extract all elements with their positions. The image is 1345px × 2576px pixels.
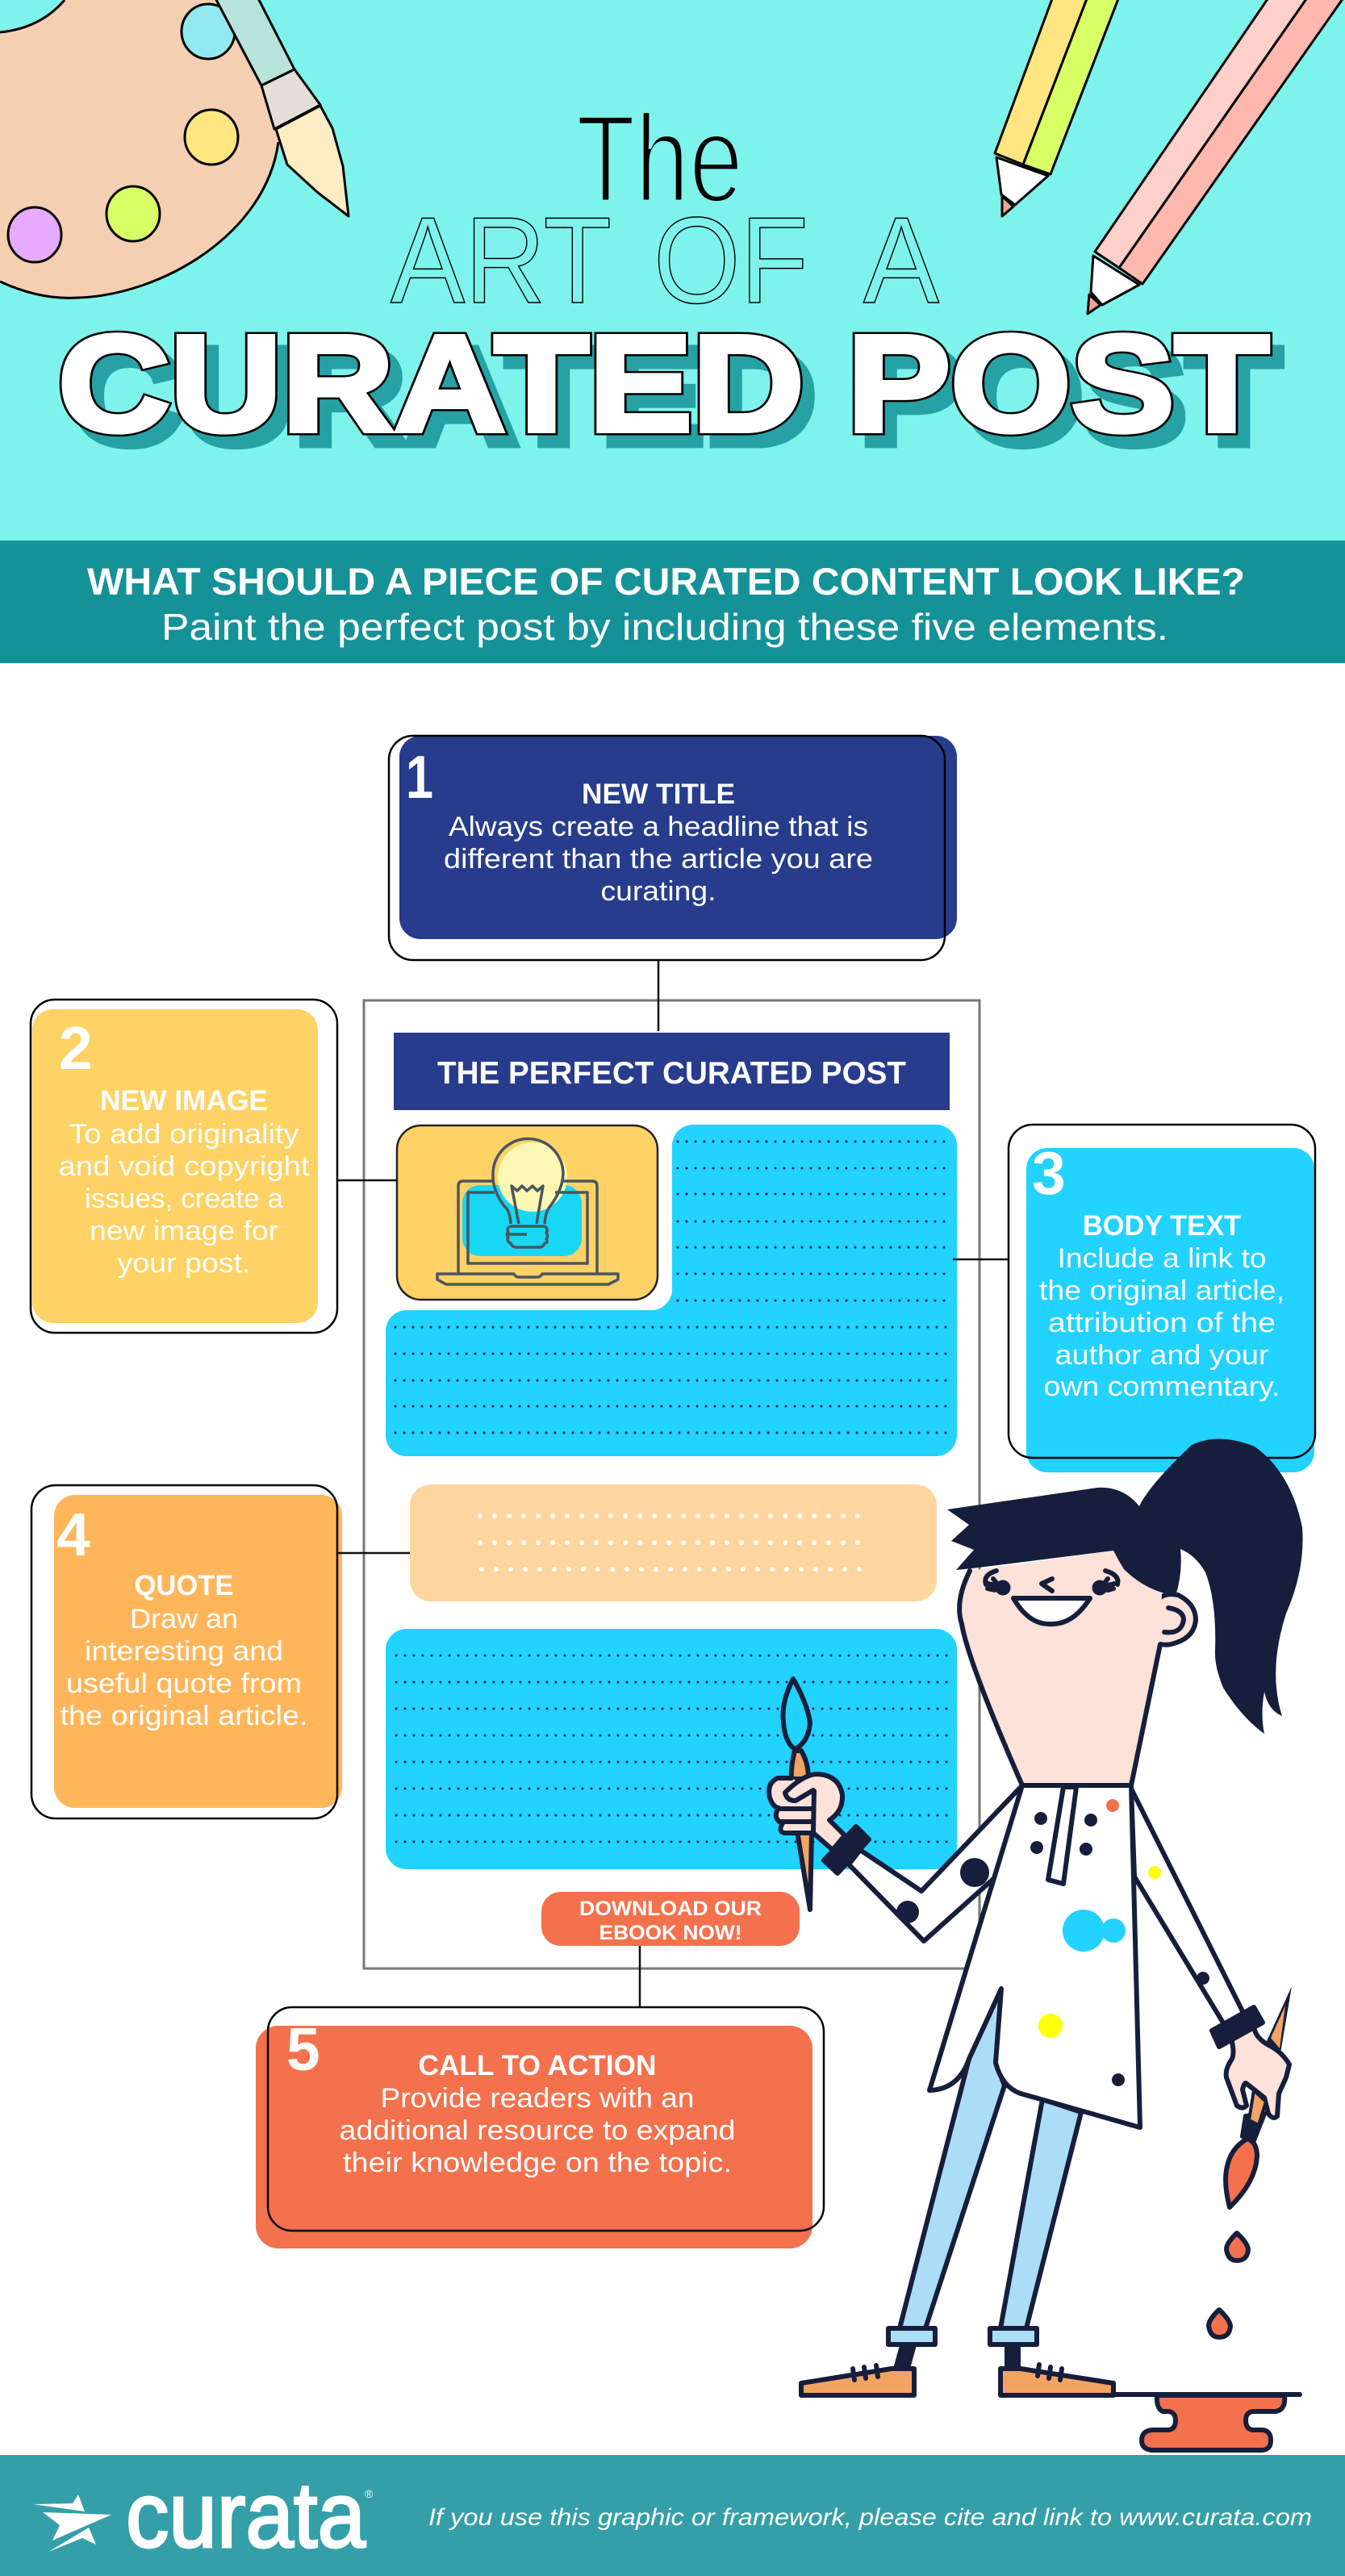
band subheading: Paint the perfect post by including these five elements. xyxy=(161,606,1168,648)
panel 2: new image: your post. xyxy=(118,1248,250,1279)
quote block xyxy=(410,1484,937,1601)
call to action button: DOWNLOAD OUR xyxy=(579,1898,762,1920)
panel 4: quote: 4 xyxy=(56,1501,90,1568)
post heading xyxy=(394,1033,950,1110)
illustration: painter character xyxy=(769,1438,1303,2450)
title: Art of a: OF xyxy=(654,192,808,329)
panel: perfect post frame xyxy=(364,1000,980,1969)
panel 1: new title: 1 xyxy=(406,743,433,811)
panel 4: quote: useful quote from xyxy=(66,1668,302,1699)
panel 5: call to action: additional resource to expand xyxy=(339,2115,736,2146)
image block with lightbulb and laptop xyxy=(397,1125,658,1300)
panel 5: call to action: CALL TO ACTION xyxy=(418,2050,657,2081)
icon: top paintbrush xyxy=(215,0,349,216)
panel 4: quote xyxy=(31,1485,342,1818)
sleeves xyxy=(849,1785,1243,2024)
footer xyxy=(0,2455,1345,2576)
panel 5: call to action xyxy=(256,2007,824,2248)
panel 4: quote: QUOTE xyxy=(134,1570,234,1601)
panel 2: new image: To add originality xyxy=(69,1119,299,1150)
connectors xyxy=(337,960,1009,2007)
logo wordmark: curata xyxy=(126,2464,365,2567)
panel 1: new title: curating. xyxy=(600,876,716,907)
title: The: The xyxy=(576,89,743,228)
logo star xyxy=(33,2495,111,2552)
post heading: THE PERFECT CURATED POST xyxy=(437,1056,906,1091)
panel 2: new image: NEW IMAGE xyxy=(100,1085,268,1117)
panel 3: body text: BODY TEXT xyxy=(1083,1210,1241,1242)
panel 5: call to action: 5 xyxy=(286,2015,320,2083)
panel 3: body text: the original article, xyxy=(1039,1275,1284,1306)
panel 2: new image: issues, create a xyxy=(85,1184,283,1214)
call to action button: EBOOK NOW! xyxy=(599,1922,742,1944)
panel 1: new title: Always create a headline that is xyxy=(449,812,868,842)
panel 3: body text: own commentary. xyxy=(1044,1372,1280,1402)
panel 1: new title: different than the article you are xyxy=(444,844,873,875)
icon: paint palette xyxy=(0,0,278,298)
panel 4: quote: the original article. xyxy=(60,1701,308,1731)
icon: pink pencil xyxy=(1088,0,1344,314)
panel 1: new title xyxy=(389,736,957,960)
title: Curated Post: CURATED POST xyxy=(58,307,1269,461)
panel 1: new title: NEW TITLE xyxy=(582,779,735,810)
panel 4: quote: interesting and xyxy=(85,1636,283,1667)
icon: yellow pencil xyxy=(995,0,1119,216)
hair xyxy=(947,1438,1303,1734)
panel 5: call to action: their knowledge on the topic. xyxy=(343,2148,732,2178)
call to action button xyxy=(541,1892,800,1946)
coat xyxy=(929,1785,1140,2127)
panel 2: new image xyxy=(31,1000,337,1333)
legs and shoes xyxy=(801,1989,1300,2395)
panel 3: body text: attribution of the xyxy=(1048,1308,1276,1338)
panel 2: new image: new image for xyxy=(90,1216,278,1246)
panel 3: body text: author and your xyxy=(1055,1340,1268,1371)
panel 4: quote: Draw an xyxy=(130,1604,238,1635)
head and face xyxy=(959,1551,1196,1785)
panel 3: body text xyxy=(1009,1125,1315,1472)
right hand, brush and drips xyxy=(1209,1986,1292,2337)
panel 3: body text: 3 xyxy=(1032,1139,1066,1207)
panel 5: call to action: Provide readers with an xyxy=(381,2083,694,2114)
band heading: WHAT SHOULD A PIECE OF CURATED CONTENT LOOK LIKE? xyxy=(87,560,1245,603)
paint puddle xyxy=(1142,2395,1284,2450)
panel 2: new image: 2 xyxy=(59,1014,93,1082)
body text block top xyxy=(386,1125,957,1456)
left hand and brush xyxy=(769,1679,869,1910)
panel 3: body text: Include a link to xyxy=(1057,1243,1267,1274)
registered mark: ® xyxy=(365,2487,374,2500)
title: Art of a xyxy=(391,192,940,329)
body text block bottom xyxy=(386,1629,957,1869)
title: Curated Post: CURATED POST xyxy=(58,307,1269,461)
header background xyxy=(0,0,1345,541)
subtitle band xyxy=(0,541,1345,663)
title: Art of a: A xyxy=(863,192,940,329)
title: Art of a: ART xyxy=(391,192,612,329)
panel 2: new image: and void copyright xyxy=(58,1151,310,1182)
citation text: If you use this graphic or framework, please cite and link to www.curata.com xyxy=(428,2504,1312,2531)
